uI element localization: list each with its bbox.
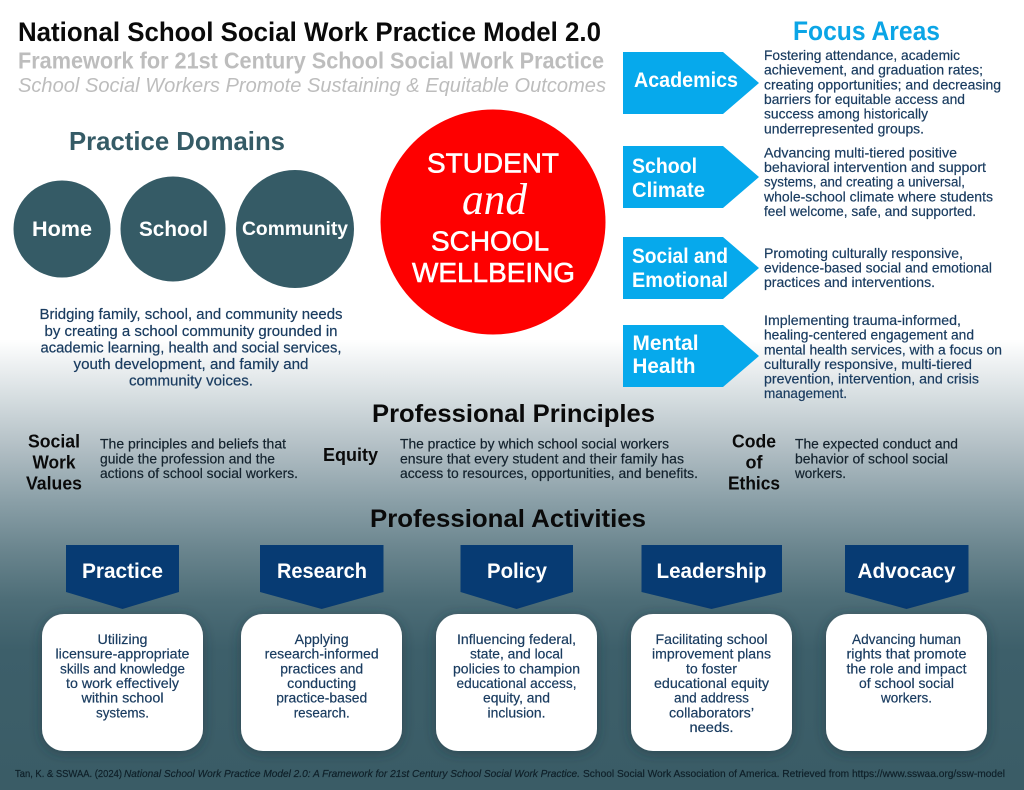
center circle: student and school wellbeing (380, 110, 606, 334)
card: research: practice-based (276, 690, 367, 706)
text: social and emotional: evidence-based social and emotional (764, 260, 992, 276)
circle: community: Community (242, 219, 348, 240)
circle: community (236, 170, 354, 288)
banner: advocacy (845, 545, 968, 609)
card: research: research-informed (265, 646, 379, 662)
panel: professional activities (42, 505, 987, 751)
text: social and emotional: Promoting culturally responsive, (764, 245, 963, 261)
card: policy: state, and local (470, 646, 563, 662)
heading: professional principles: Professional Principles (372, 400, 655, 428)
banner: research (260, 545, 384, 609)
card: policy: Influencing federal, (457, 631, 576, 647)
text: mental health: culturally responsive, multi-tiered (764, 356, 972, 372)
card: leadership: educational equity (654, 675, 769, 691)
heading: professional activities: Professional Activities (370, 505, 646, 533)
citation footer: Tan, K. & SSWAA. (2024) (15, 768, 122, 780)
text: academics: Fostering attendance, academic (764, 47, 960, 63)
banner: practice: Practice (82, 560, 163, 583)
text: academics: creating opportunities; and decreasing (764, 76, 1001, 92)
domains description: academic learning, health and social services, (40, 340, 342, 356)
text: school climate (763, 144, 993, 219)
subtitle: Framework for 21st Century School Social Work Practice (18, 48, 604, 74)
card: policy: policies to champion (453, 660, 580, 676)
banner: leadership (642, 545, 782, 609)
main title: National School Social Work Practice Model 2.0 (18, 17, 601, 47)
center circle: student and school wellbeing: WELLBEING (412, 257, 575, 288)
text: mental health: management. (764, 385, 847, 401)
text: code of ethics (794, 436, 958, 481)
text: social work values (100, 436, 298, 481)
citation footer (15, 768, 1005, 780)
domains description: youth development, and family and (74, 357, 308, 373)
text: code of ethics: The expected conduct and (795, 436, 958, 452)
arrow: school climate (623, 146, 759, 208)
arrow: social and emotional: Social and (632, 245, 728, 268)
label: code of ethics: Code (732, 432, 776, 452)
arrow: mental health (623, 325, 759, 387)
banner: policy: Policy (487, 560, 547, 583)
text: academics: underrepresented groups. (764, 120, 924, 136)
text: academics (764, 47, 1001, 136)
card: leadership (631, 614, 792, 751)
card: leadership: and address (674, 690, 749, 706)
card: research: practices and (280, 660, 363, 676)
card: practice (42, 614, 203, 751)
card: leadership: needs. (690, 719, 734, 735)
text: code of ethics: behavior of school social (795, 450, 948, 466)
card: advocacy (826, 614, 987, 751)
text: equity: access to resources, opportunities, and benefits. (400, 465, 698, 481)
text: social work values: actions of school social workers. (100, 465, 298, 481)
card: leadership: improvement plans (652, 646, 771, 662)
text: mental health: Implementing trauma-informed, (764, 312, 961, 328)
arrow: mental health: Health (632, 355, 696, 378)
arrow: school climate: School (632, 155, 697, 178)
text: school climate: behavioral intervention and support (764, 159, 986, 175)
text: code of ethics: workers. (794, 465, 846, 481)
circle: school (120, 176, 226, 282)
card: advocacy: of school social (859, 675, 954, 691)
arrow: social and emotional (623, 237, 759, 299)
arrow: social and emotional: Emotional (632, 269, 728, 292)
card: policy: inclusion. (488, 704, 546, 720)
text: social work values: guide the profession and the (100, 450, 275, 466)
label: equity: Equity (323, 445, 378, 465)
card: advocacy: Advancing human (852, 631, 961, 647)
center circle: student and school wellbeing: STUDENT (427, 148, 559, 178)
domains description: Bridging family, school, and community needs (40, 307, 342, 323)
circle: home (14, 180, 110, 278)
label: code of ethics: of (746, 452, 763, 472)
card: practice: skills and knowledge (60, 660, 185, 676)
text: mental health (764, 312, 1002, 401)
text: social and emotional: practices and interventions. (764, 274, 935, 290)
card: practice: Utilizing (98, 631, 148, 647)
heading: focus areas: Focus Areas (793, 16, 940, 46)
heading: practice domains: Practice Domains (69, 126, 285, 156)
tagline: School Social Workers Promote Sustaining & Equitable Outcomes (18, 75, 606, 97)
text: school climate: whole-school climate where students (763, 188, 993, 204)
text: academics: success among historically (764, 106, 928, 122)
banner: advocacy: Advocacy (858, 560, 956, 583)
text: school climate: Advancing multi-tiered positive (764, 144, 957, 160)
card: leadership: collaborators’ (669, 704, 754, 720)
panel: focus areas (623, 16, 1002, 401)
text: mental health: prevention, intervention, and crisis (764, 371, 979, 387)
card: leadership: to foster (686, 660, 737, 676)
title block (18, 17, 606, 97)
label: social work values: Values (26, 474, 82, 494)
card: practice: licensure-appropriate (56, 646, 190, 662)
text: equity: The practice by which school social workers (400, 436, 669, 452)
circle: school: School (139, 218, 208, 241)
label: code of ethics: Ethics (728, 474, 780, 494)
text: academics: achievement, and graduation rates; (764, 62, 983, 78)
text: school climate: systems, and creating a universal, (764, 174, 965, 190)
card: policy: equity, and (483, 690, 550, 706)
text: academics: barriers for equitable access and (764, 91, 965, 107)
arrow: mental health: Mental (632, 332, 698, 355)
center circle: student and school wellbeing: SCHOOL (431, 226, 549, 256)
card: research (241, 614, 402, 751)
label: social work values: Work (32, 452, 76, 472)
card: leadership: Facilitating school (656, 631, 768, 647)
arrow: academics (623, 52, 759, 114)
text: school climate: feel welcome, safe, and supported. (764, 203, 976, 219)
text: mental health: mental health services, with a focus on (764, 341, 1002, 357)
card: research: research. (294, 704, 350, 720)
banner: research: Research (277, 560, 367, 583)
text: social and emotional (764, 245, 992, 290)
arrow: school climate: Climate (632, 179, 705, 202)
card: practice: within school (80, 690, 164, 706)
center circle: student and school wellbeing: and (462, 175, 528, 224)
banner: policy (460, 545, 573, 609)
circle: home: Home (32, 218, 92, 241)
card: policy: educational access, (456, 675, 576, 691)
label: code of ethics (728, 432, 780, 494)
label: social work values (26, 432, 82, 494)
domains description (40, 307, 342, 390)
banner: practice (66, 545, 179, 609)
domains description: by creating a school community grounded in (44, 324, 338, 340)
text: equity (400, 436, 698, 481)
domains description: community voices. (129, 374, 253, 390)
card: research: conducting (287, 675, 356, 691)
arrow: academics: Academics (634, 69, 738, 92)
card: advocacy: rights that promote (846, 646, 967, 662)
panel: professional principles (26, 400, 958, 494)
citation footer: National School Work Practice Model 2.0: A Framework for 21st Century School Social Work Practice. (124, 768, 580, 780)
text: social work values: The principles and beliefs that (100, 436, 286, 452)
banner: leadership: Leadership (656, 560, 766, 583)
text: mental health: healing-centered engagement and (764, 327, 974, 343)
label: social work values: Social (28, 432, 80, 452)
card: advocacy: the role and impact (846, 660, 967, 676)
panel: practice domains (14, 126, 354, 390)
card: research: Applying (295, 631, 349, 647)
card: policy (436, 614, 597, 751)
card: practice: systems. (96, 704, 149, 720)
card: practice: to work effectively (66, 675, 179, 691)
card: advocacy: workers. (880, 690, 932, 706)
text: equity: ensure that every student and their family has (400, 450, 684, 466)
citation footer: School Social Work Association of America. Retrieved from https://www.sswaa.org/ssw-model (583, 768, 1005, 780)
